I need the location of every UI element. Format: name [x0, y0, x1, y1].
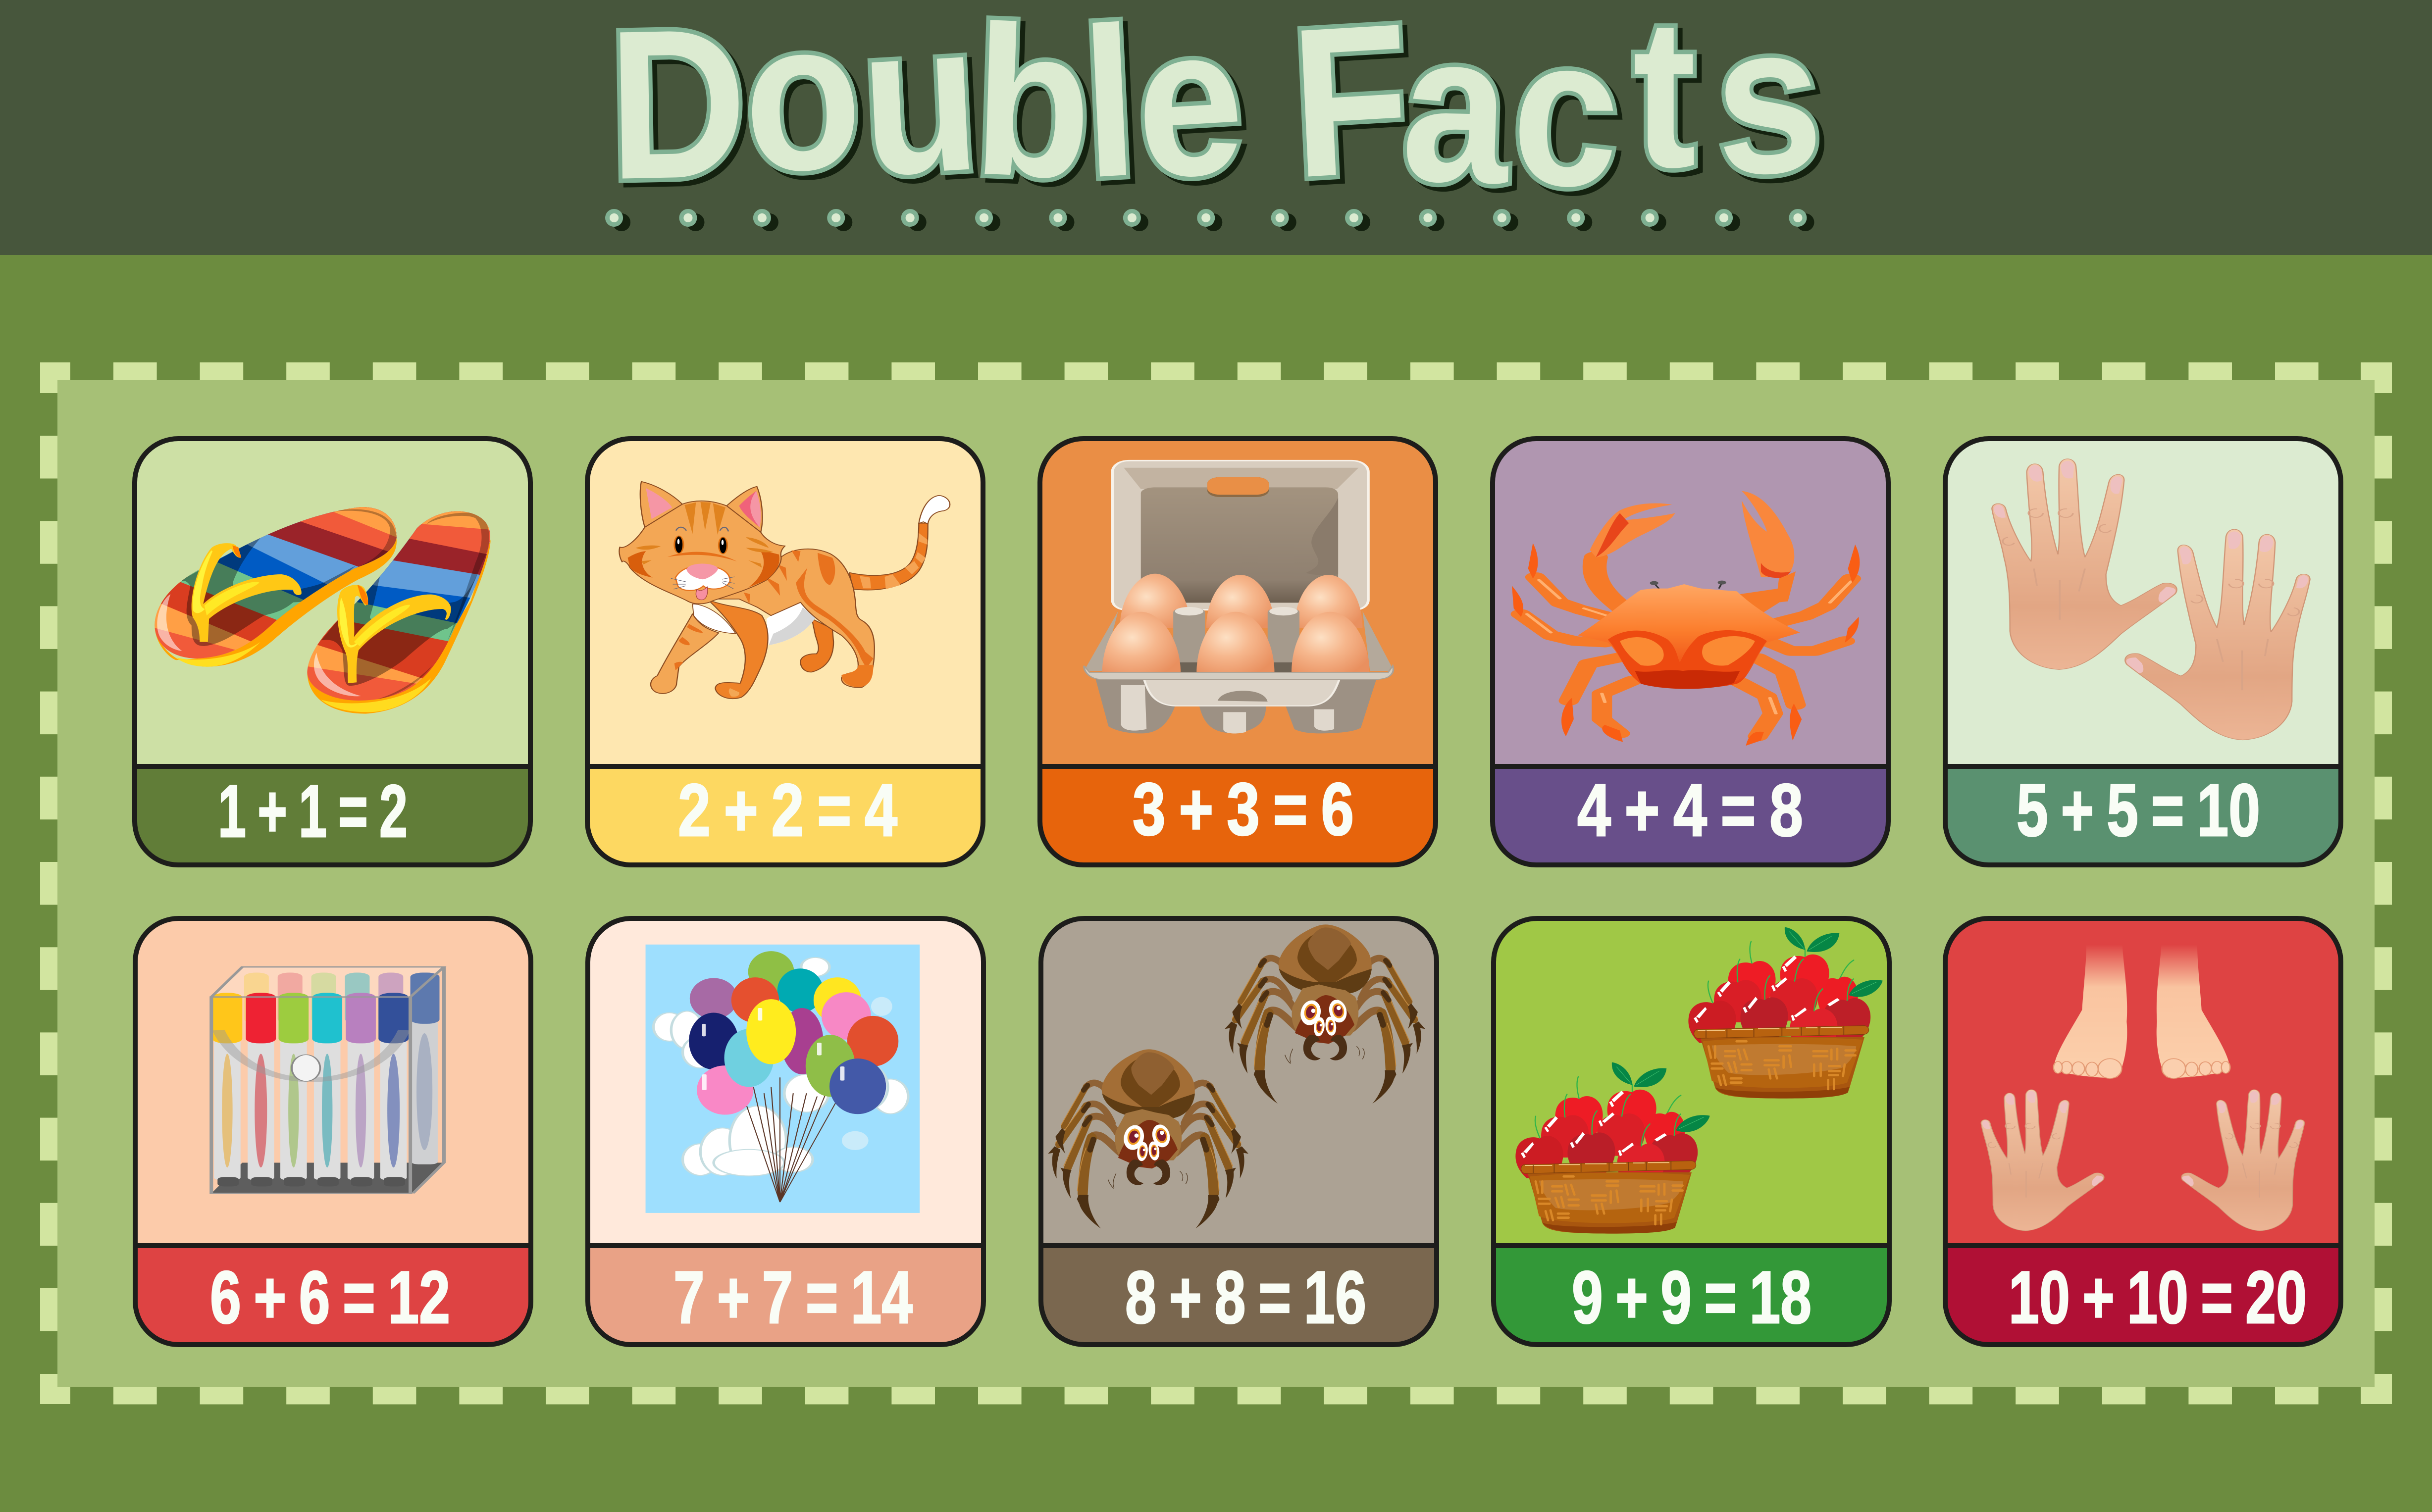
- icon: two baskets of apples: [1515, 927, 1883, 1234]
- icon: two feet and two hands: [1981, 945, 2305, 1231]
- equation: 4 + 4 = 8: [1577, 768, 1803, 852]
- card frame: [135, 918, 531, 1345]
- card frame: [1493, 439, 1888, 865]
- card: 2 + 2 = 4: [587, 439, 983, 865]
- dashed panel border: [40, 362, 2392, 1404]
- icon: two hands: [1992, 459, 2310, 740]
- icon: two spiders: [1048, 924, 1425, 1228]
- card frame: [1494, 918, 1889, 1345]
- card frame: [135, 439, 530, 865]
- card frame: [1041, 918, 1437, 1345]
- card frame: [587, 439, 983, 865]
- equation: 10 + 10 = 20: [2009, 1256, 2307, 1339]
- main panel: [57, 380, 2375, 1387]
- card: 6 + 6 = 12: [135, 918, 531, 1345]
- icon: crab: [1512, 491, 1860, 746]
- equation: 8 + 8 = 16: [1125, 1256, 1366, 1339]
- card: 7 + 7 = 14: [588, 918, 983, 1345]
- card: 8 + 8 = 16: [1041, 918, 1437, 1345]
- card: 10 + 10 = 20: [1945, 918, 2341, 1345]
- card frame: [1040, 439, 1436, 865]
- equation: 2 + 2 = 4: [678, 768, 897, 852]
- card frame: [588, 918, 983, 1345]
- equation: 5 + 5 = 10: [2017, 768, 2260, 852]
- card: 3 + 3 = 6: [1040, 439, 1436, 865]
- icon: marker pens in a case: [211, 967, 444, 1193]
- card: 4 + 4 = 8: [1493, 439, 1888, 865]
- card frame: [1945, 918, 2341, 1345]
- card: 1 + 1 = 2: [120, 403, 530, 865]
- equation: 1 + 1 = 2: [218, 769, 408, 853]
- equation: 6 + 6 = 12: [210, 1256, 450, 1339]
- card: 9 + 9 = 18: [1494, 918, 1889, 1345]
- equation: 3 + 3 = 6: [1133, 767, 1354, 851]
- icon: balloons in the sky: [646, 945, 920, 1213]
- header band: [0, 0, 2432, 255]
- dotted line under title: [614, 218, 1812, 222]
- icon: flip flops: [155, 507, 491, 714]
- icon: egg carton: [1084, 460, 1394, 734]
- icon: cat: [619, 482, 950, 699]
- equation: 9 + 9 = 18: [1572, 1256, 1811, 1339]
- card: 5 + 5 = 10: [1945, 439, 2341, 865]
- equation: 7 + 7 = 14: [673, 1256, 913, 1339]
- card frame: [1945, 439, 2341, 865]
